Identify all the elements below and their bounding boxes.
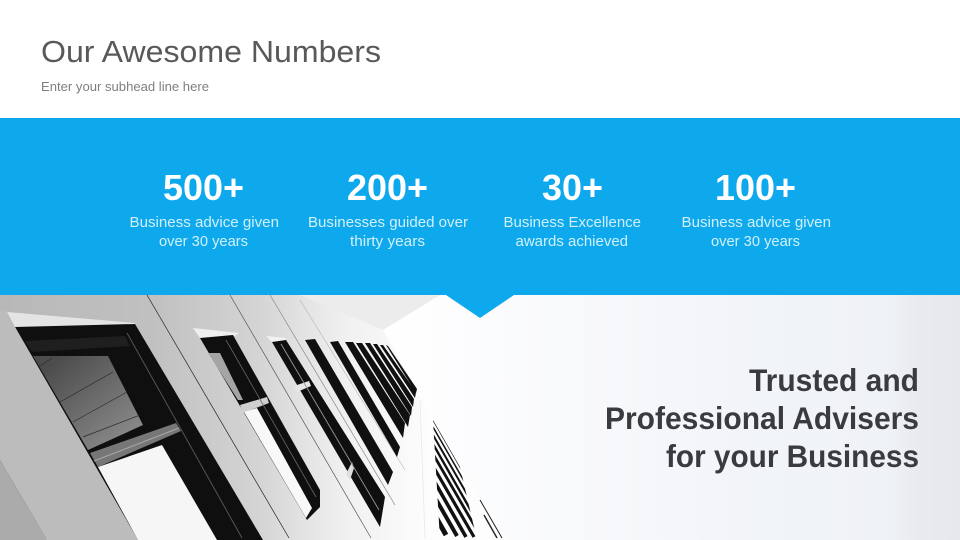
- stat: 30+: [504, 167, 641, 250]
- upper windows: [305, 339, 417, 485]
- stat: 30+: 30+: [542, 167, 603, 208]
- far tower window stripes: [480, 500, 502, 538]
- stat: 500+: Business advice given: [130, 215, 279, 231]
- stat: 100+: [682, 167, 831, 250]
- stat: 100+: over 30 years: [711, 234, 800, 250]
- window 1: [7, 312, 263, 540]
- stat: 500+: [130, 167, 279, 250]
- stat: 100+: 100+: [715, 167, 796, 208]
- building roof underside: [290, 295, 440, 330]
- tagline: for your Business: [666, 438, 919, 474]
- subhead: Enter your subhead line here: [41, 80, 209, 94]
- stat: 200+: thirty years: [350, 234, 425, 250]
- stat: 200+: [308, 167, 468, 250]
- window 2: [193, 328, 320, 520]
- window 3: [266, 336, 385, 527]
- facade panel lines: [0, 295, 425, 538]
- building facade: [0, 295, 506, 540]
- sky background: [0, 295, 960, 540]
- blue stats band with pointer: [0, 118, 960, 318]
- front pillar: [0, 310, 138, 540]
- stat: 500+: over 30 years: [159, 234, 248, 250]
- stat: 30+: awards achieved: [516, 234, 628, 250]
- stat: 500+: 500+: [163, 167, 244, 208]
- photo: building against sky: [0, 295, 960, 540]
- lower tower window stripes: [433, 420, 476, 538]
- stat: 200+: Businesses guided over: [308, 215, 468, 231]
- title: Our Awesome Numbers: [41, 34, 381, 69]
- tagline: [605, 362, 919, 474]
- stat: 30+: Business Excellence: [504, 215, 641, 231]
- tagline: Professional Advisers: [605, 400, 919, 436]
- tagline: Trusted and: [749, 362, 919, 398]
- stat: 100+: Business advice given: [682, 215, 831, 231]
- stat: 200+: 200+: [347, 167, 428, 208]
